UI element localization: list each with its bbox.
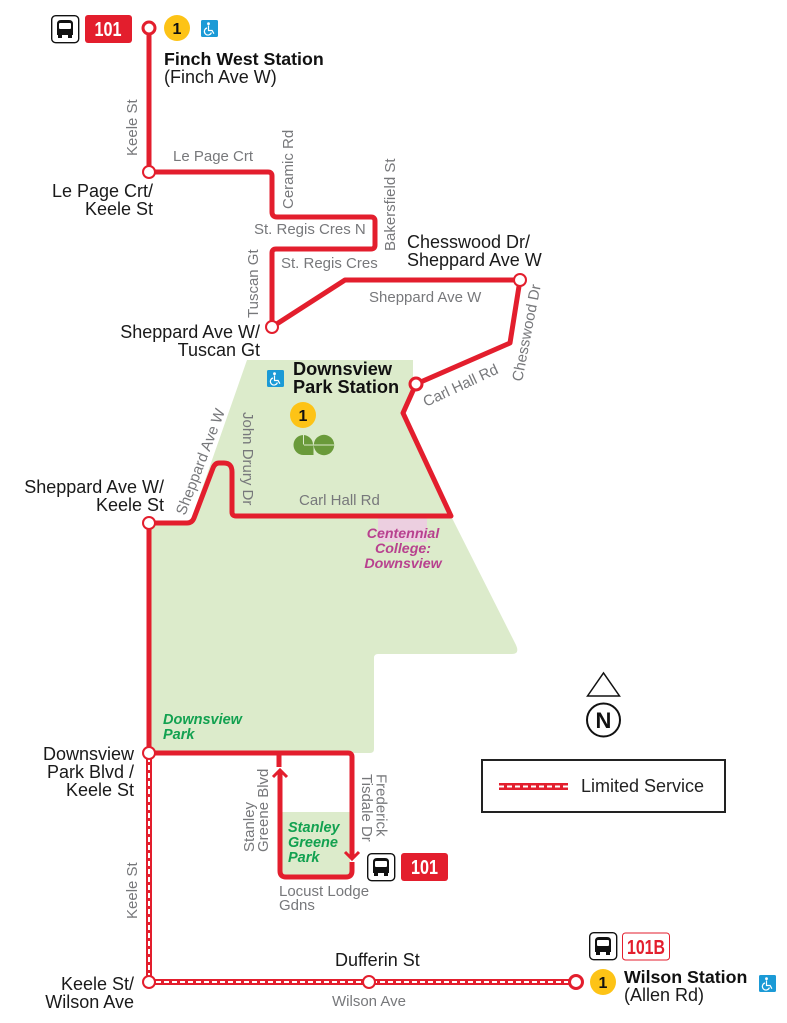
stop labels: Sheppard Ave W/	[24, 477, 164, 497]
label: Downsview Park: Park	[163, 727, 195, 743]
street labels: St. Regis Cres	[281, 255, 378, 272]
stop labels	[24, 181, 260, 1012]
street labels: John Drury Dr	[239, 412, 256, 505]
street labels	[124, 98, 545, 1010]
label: Centennial College: College:	[375, 541, 431, 557]
label: Centennial College: Centennial	[367, 526, 440, 542]
street labels: Sheppard Ave W	[173, 406, 229, 517]
header: Finch West badges	[52, 15, 218, 43]
limited service line: Keele St and Wilson Ave	[149, 753, 576, 982]
label: Centennial College	[364, 526, 443, 572]
label: Stanley Greene Park: Greene	[288, 835, 338, 851]
street labels: Stanley	[241, 801, 258, 852]
street labels: Carl Hall Rd	[299, 492, 380, 509]
street labels: Keele St	[124, 861, 141, 919]
header: Finch West badges: 1	[173, 21, 182, 38]
street labels: Chesswood Dr	[509, 283, 545, 383]
badge: 101 at Stanley Greene	[368, 853, 448, 881]
icon: subway line 1, Downsview Park: 1	[299, 408, 308, 425]
stop labels: Le Page Crt/	[52, 181, 153, 201]
label: Downsview Park Station: Downsview	[293, 359, 393, 379]
label: Wilson Station	[624, 967, 747, 1005]
label: Finch West Station	[164, 49, 324, 87]
park area: Downsview Park	[148, 360, 517, 753]
label: Stanley Greene Park	[288, 820, 341, 866]
north arrow	[587, 673, 620, 736]
stop labels: Keele St	[66, 780, 134, 800]
label: Chesswood Dr / Sheppard Ave W	[407, 232, 542, 270]
label: Downsview Park	[163, 712, 244, 743]
label: Wilson Station: (Allen Rd)	[624, 985, 704, 1005]
badge: 101B at Wilson	[590, 933, 670, 960]
icon: accessible, Wilson	[759, 975, 776, 992]
street labels: St. Regis Cres N	[254, 221, 366, 238]
label: Stanley Greene Park: Stanley	[288, 820, 341, 836]
stop labels: Tuscan Gt	[178, 340, 260, 360]
route arrow: southbound on Frederick Tisdale Dr	[345, 852, 359, 859]
label: Dufferin St: Dufferin St	[335, 950, 420, 970]
stop labels: Park Blvd /	[47, 762, 134, 782]
badge: 101B at Wilson: 101B	[627, 937, 665, 959]
stop markers	[143, 22, 582, 988]
street labels: Greene Blvd	[255, 769, 272, 852]
label: Finch West Station: (Finch Ave W)	[164, 67, 277, 87]
legend: Limited Service: Limited Service	[581, 776, 704, 796]
icon: subway line 1, Wilson: 1	[599, 975, 608, 992]
header: Finch West badges: 101	[94, 19, 122, 41]
label: Finch West Station: Finch West Station	[164, 49, 324, 69]
icon: subway line 1, Downsview Park	[290, 402, 316, 428]
label: Chesswood Dr / Sheppard Ave W: Sheppard Ave W	[407, 250, 542, 270]
north arrow: N	[596, 708, 611, 733]
Centennial College highlight	[378, 518, 427, 542]
label: Downsview Park Station	[293, 359, 399, 397]
badge: 101 at Stanley Greene: 101	[411, 857, 438, 879]
stop labels: Keele St	[85, 199, 153, 219]
street labels: Bakersfield St	[382, 158, 399, 251]
street labels: Tisdale Dr	[358, 774, 375, 842]
stop labels: Wilson Ave	[45, 992, 134, 1012]
stop labels: Sheppard Ave W/	[120, 322, 260, 342]
street labels: Sheppard Ave W	[369, 289, 482, 306]
icon: accessible, Downsview Park	[267, 370, 284, 387]
street labels: Frederick	[372, 774, 390, 837]
street labels: Ceramic Rd	[280, 130, 297, 209]
icon: GO Transit	[294, 435, 334, 455]
street labels: Locust Lodge	[279, 883, 369, 900]
label: Downsview Park: Downsview	[163, 712, 244, 728]
street labels: Keele St	[124, 98, 141, 156]
icon: subway line 1, Wilson	[590, 969, 616, 995]
street labels: Gdns	[279, 897, 315, 914]
label: Downsview Park Station: Park Station	[293, 377, 399, 397]
label: Stanley Greene Park: Park	[288, 850, 320, 866]
street labels: Le Page Crt	[173, 148, 254, 165]
stop labels: Downsview	[43, 744, 135, 764]
stop labels: Keele St/	[61, 974, 134, 994]
route line: main 101	[149, 28, 520, 877]
route arrow: northbound on Stanley Greene Blvd	[273, 770, 287, 777]
label: Chesswood Dr / Sheppard Ave W: Chesswood Dr/	[407, 232, 530, 252]
street labels: Carl Hall Rd	[421, 361, 501, 411]
legend: Limited Service	[482, 760, 725, 812]
street labels: Tuscan Gt	[245, 249, 262, 318]
label: Wilson Station: Wilson Station	[624, 967, 747, 987]
stop labels: Keele St	[96, 495, 164, 515]
street labels: Wilson Ave	[332, 993, 406, 1010]
park area: Stanley Greene Park	[282, 812, 350, 875]
label: Centennial College: Downsview	[364, 556, 443, 572]
